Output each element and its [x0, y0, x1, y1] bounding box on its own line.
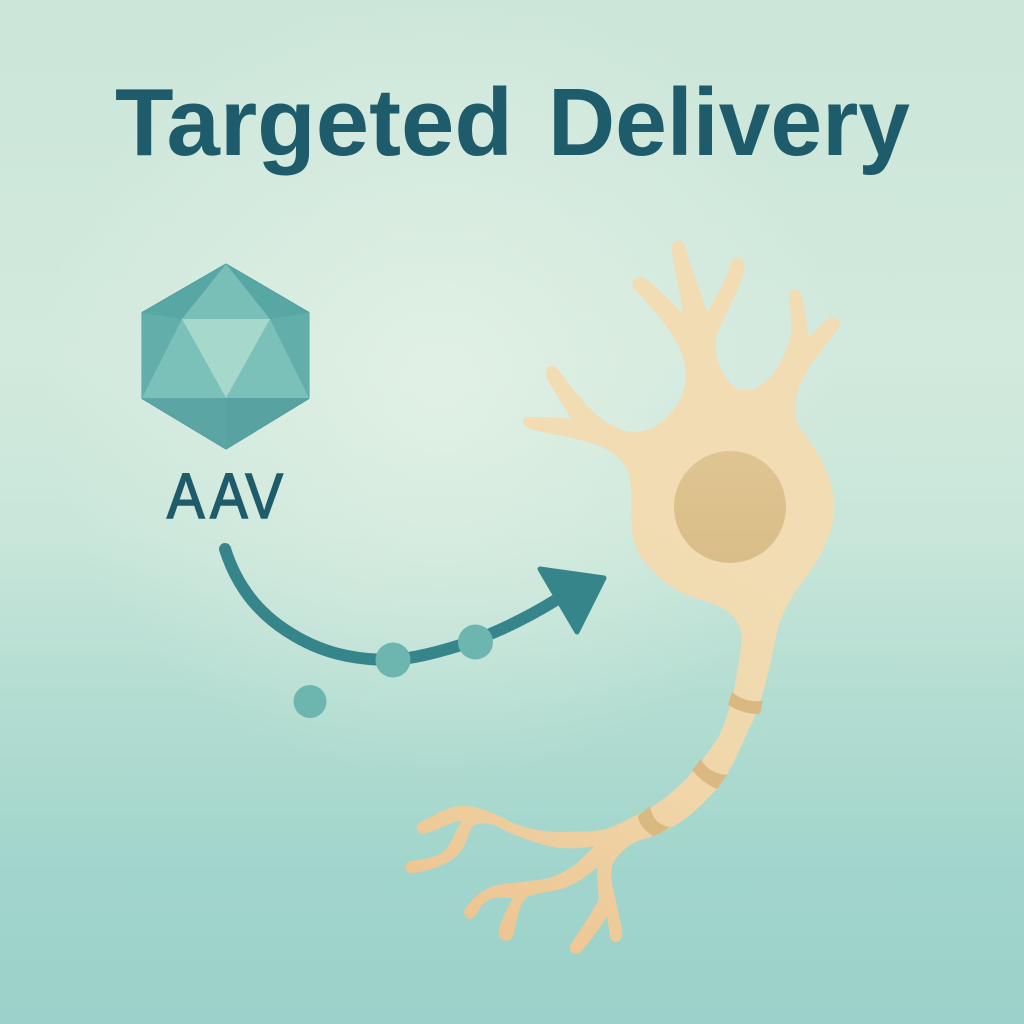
nucleus	[674, 451, 786, 563]
particle on path	[458, 624, 493, 660]
title: Targeted	[115, 69, 513, 176]
title: Delivery	[548, 69, 910, 176]
AAV label: AAV	[167, 460, 283, 532]
neuron	[407, 242, 838, 953]
icon: AAV capsid	[142, 264, 309, 449]
free particle	[294, 685, 326, 718]
arrow: delivery path	[225, 549, 604, 660]
neuron body, dendrites and axon	[407, 242, 838, 953]
myelin band 3	[638, 806, 670, 836]
myelin band 1	[728, 692, 763, 714]
particle on path	[376, 642, 410, 678]
title	[115, 69, 910, 176]
myelin band 2	[692, 759, 727, 789]
